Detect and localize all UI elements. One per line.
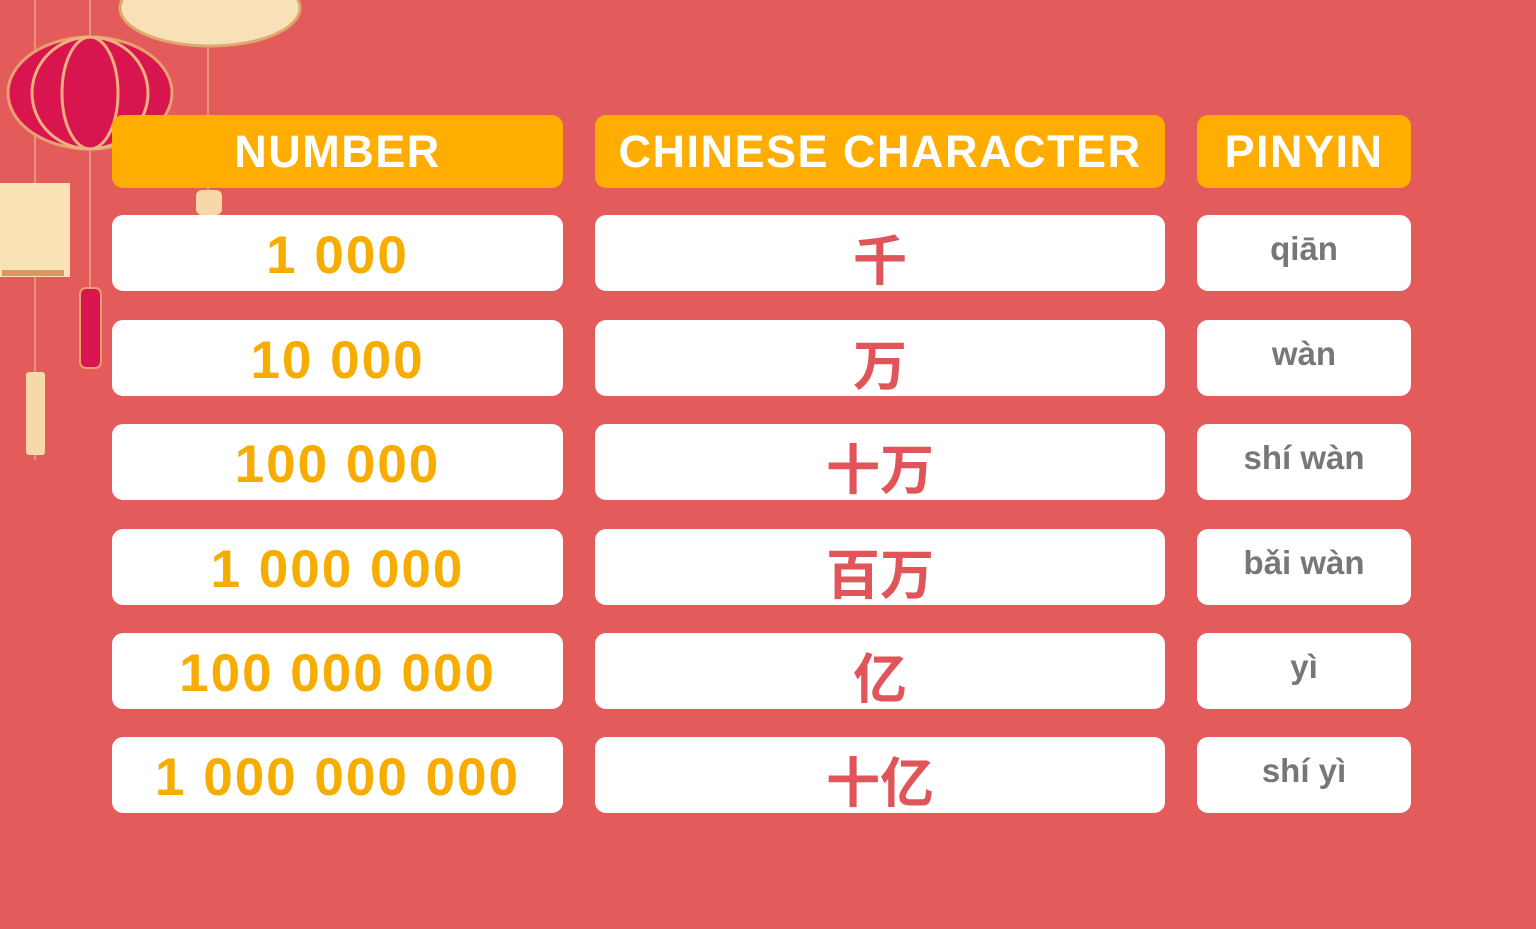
row 2 character [595, 320, 1165, 396]
header: pinyin [1197, 115, 1411, 188]
row 5 number [112, 633, 563, 709]
row 6 number: 1 000 000 000 [155, 748, 520, 806]
row 2 number: 10 000 [250, 330, 425, 390]
row 5 character [595, 633, 1165, 709]
row 1 number [112, 215, 563, 291]
header: chinese character: CHINESE CHARACTER [618, 126, 1142, 176]
row 5 pinyin: yì [1290, 648, 1318, 685]
row 5 number: 100 000 000 [179, 644, 496, 702]
row 2 character: 万 [853, 322, 907, 400]
row 4 character: 百万 [826, 530, 934, 610]
row 5 character: 亿 [853, 634, 907, 714]
row 4 character [595, 529, 1165, 605]
row 3 pinyin: shí wàn [1243, 439, 1365, 476]
row 3 character [595, 424, 1165, 500]
header: number [112, 115, 563, 188]
row 4 number: 1 000 000 [211, 540, 464, 598]
header: pinyin: PINYIN [1224, 126, 1384, 176]
row 1 character [595, 215, 1165, 291]
row 3 character: 十万 [826, 426, 934, 504]
row 6 pinyin: shí yì [1262, 752, 1346, 789]
header: chinese character [595, 115, 1165, 188]
header: number: NUMBER [234, 126, 441, 176]
row 1 number: 1 000 [266, 226, 409, 284]
row 5 pinyin [1197, 633, 1411, 709]
decoration: lanterns [0, 0, 302, 460]
row 3 number: 100 000 [235, 434, 440, 494]
row 1 pinyin [1197, 215, 1411, 291]
row 6 character [595, 737, 1165, 813]
row 6 character: 十亿 [826, 738, 934, 818]
row 6 number [112, 737, 563, 813]
row 2 number [112, 320, 563, 396]
row 3 pinyin [1197, 424, 1411, 500]
row 1 pinyin: qiān [1270, 230, 1338, 267]
row 1 character: 千 [853, 216, 907, 296]
row 2 pinyin [1197, 320, 1411, 396]
row 3 number [112, 424, 563, 500]
row 2 pinyin: wàn [1272, 335, 1336, 372]
row 4 pinyin: bǎi wàn [1243, 544, 1365, 581]
row 4 pinyin [1197, 529, 1411, 605]
row 4 number [112, 529, 563, 605]
row 6 pinyin [1197, 737, 1411, 813]
